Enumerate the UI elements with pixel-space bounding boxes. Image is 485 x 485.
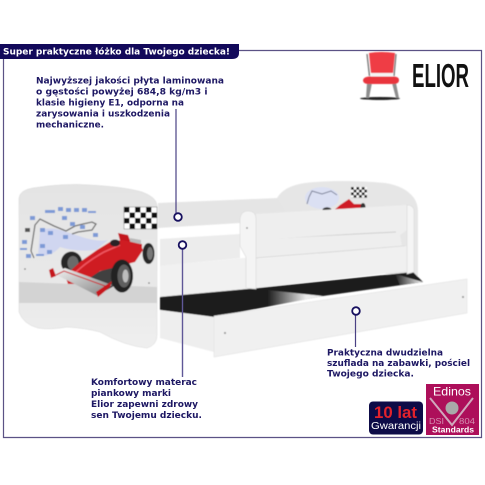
text: board quality: klasie higieny E1, odporna na bbox=[36, 98, 184, 108]
inner mattress behind guard bbox=[256, 230, 407, 258]
logo: Elior bbox=[360, 52, 469, 100]
front wing bbox=[53, 268, 112, 296]
checkered flag bbox=[124, 207, 157, 229]
badge: Edinos standards: DSI bbox=[429, 417, 444, 426]
back rail bbox=[158, 198, 286, 228]
bed illustration bbox=[19, 181, 467, 357]
badge: Edinos standards: Edinos bbox=[433, 384, 471, 398]
page frame bbox=[4, 50, 482, 438]
text: mattress bbox=[91, 377, 202, 421]
text: board quality: mechaniczne. bbox=[36, 120, 104, 130]
text: drawer: Praktyczna dwudzielna bbox=[327, 348, 443, 358]
callout marker: mattress bbox=[179, 241, 186, 377]
badge: 10 year warranty bbox=[369, 402, 423, 434]
front left wheel bbox=[61, 252, 82, 274]
red race car bbox=[49, 233, 154, 297]
rear wheel bbox=[142, 243, 154, 264]
badge: 10 year warranty: Gwarancji bbox=[371, 421, 421, 432]
text: drawer bbox=[327, 348, 470, 380]
badge: Edinos standards: Standards bbox=[432, 426, 475, 434]
mattress bbox=[160, 234, 240, 266]
bed base bbox=[160, 310, 214, 352]
drawer bbox=[214, 279, 467, 357]
text: board quality bbox=[36, 76, 224, 130]
under-bed shadow bbox=[160, 272, 423, 318]
text: board quality: o gęstości powyżej 684,8 kg/m3 i bbox=[36, 86, 208, 98]
callout marker: drawer bbox=[352, 307, 360, 347]
front headboard panel bbox=[19, 184, 157, 348]
bed side bbox=[160, 256, 258, 298]
callout marker: board bbox=[174, 109, 182, 221]
rear headboard bbox=[277, 181, 418, 280]
text: mattress: sen Twojemu dziecku. bbox=[91, 410, 202, 421]
header banner: Super praktyczne łóżko dla Twojego dziecka! bbox=[3, 46, 230, 58]
text: mattress: Komfortowy materac bbox=[91, 377, 197, 388]
grey road stripe bbox=[19, 282, 157, 303]
headboard mini graphic bbox=[305, 187, 367, 213]
text: drawer: szuflada na zabawki, pościel bbox=[327, 358, 470, 369]
text: mattress: Elior zapewni zdrowy bbox=[91, 399, 198, 410]
icon: red chair bbox=[360, 52, 400, 100]
badge: Edinos standards: 804 bbox=[459, 417, 476, 426]
front right wheel bbox=[111, 260, 133, 292]
badge: 10 year warranty: 10 lat bbox=[374, 403, 417, 422]
text: drawer: Twojego dziecka. bbox=[327, 368, 414, 380]
text: board quality: Najwyższej jakości płyta laminowana bbox=[36, 76, 224, 86]
car body bbox=[66, 240, 143, 284]
rear wing bbox=[118, 233, 142, 250]
race track map bbox=[20, 207, 108, 258]
floor shadow bbox=[88, 266, 118, 292]
guard rail bbox=[240, 205, 414, 289]
text: board quality: zarysowania i uszkodzenia bbox=[36, 108, 170, 120]
text: mattress: piankowy marki bbox=[91, 388, 171, 399]
badge: Edinos standards bbox=[426, 384, 479, 435]
